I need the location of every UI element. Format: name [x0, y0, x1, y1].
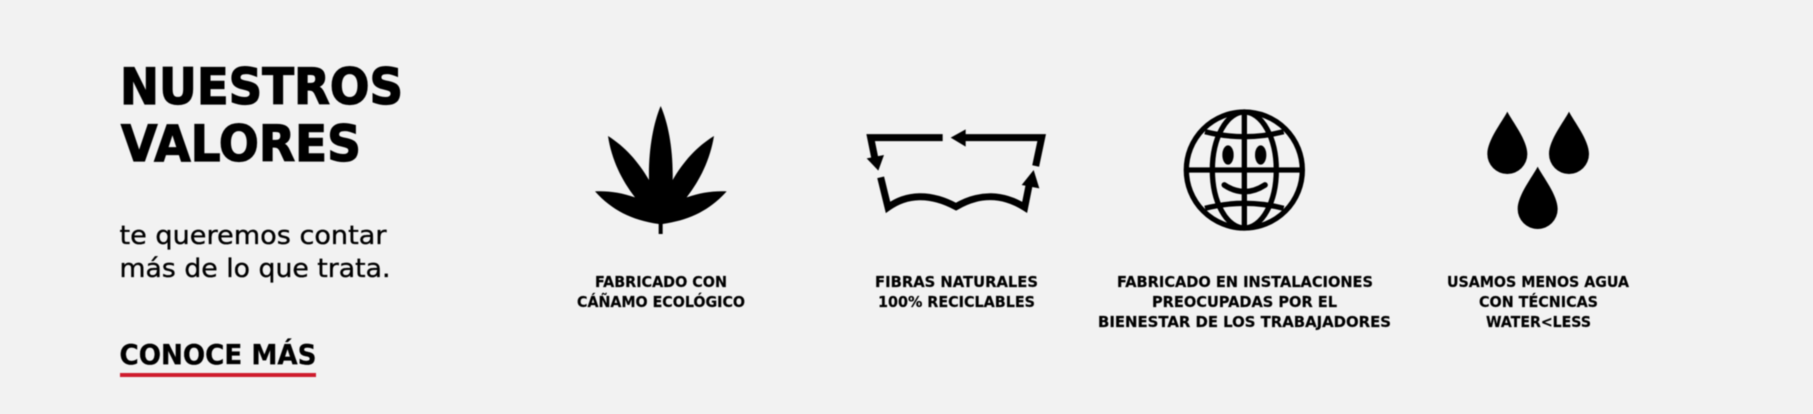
label: fibers: 100% RECICLABLES: [878, 293, 1035, 311]
label: water: USAMOS MENOS AGUA: [1447, 273, 1629, 291]
icon: recycling arrows in jeans tab shape: [867, 129, 1042, 207]
label: facilities: FABRICADO EN INSTALACIONES: [1117, 273, 1373, 291]
label: hemp: [577, 273, 745, 311]
icon: three water drops: [1487, 112, 1589, 229]
label: facilities: BIENESTAR DE LOS TRABAJADORES: [1098, 313, 1391, 331]
title: Nuestros valores: VALORES: [121, 115, 361, 173]
label: fibers: [875, 273, 1038, 311]
icon: hemp leaf: [595, 106, 727, 234]
intro text block: te queremos contar: [120, 221, 387, 251]
label: fibers: FIBRAS NATURALES: [875, 273, 1038, 291]
label: facilities: [1098, 273, 1391, 331]
icon: smiling globe: [1186, 112, 1302, 228]
label: water: [1447, 273, 1629, 331]
label: water: CON TÉCNICAS: [1479, 292, 1598, 311]
label: facilities: PREOCUPADAS POR EL: [1152, 293, 1337, 311]
title: Nuestros valores: [120, 58, 403, 173]
link: conoce más with red underline: CONOCE MÁS: [120, 337, 316, 371]
intro text block: más de lo que trata.: [120, 254, 390, 284]
label: hemp: FABRICADO CON: [595, 273, 727, 291]
intro text block: [120, 221, 390, 284]
label: hemp: CÁÑAMO ECOLÓGICO: [577, 292, 745, 311]
title: Nuestros valores: NUESTROS: [120, 58, 403, 116]
label: water: WATER<LESS: [1486, 313, 1591, 331]
